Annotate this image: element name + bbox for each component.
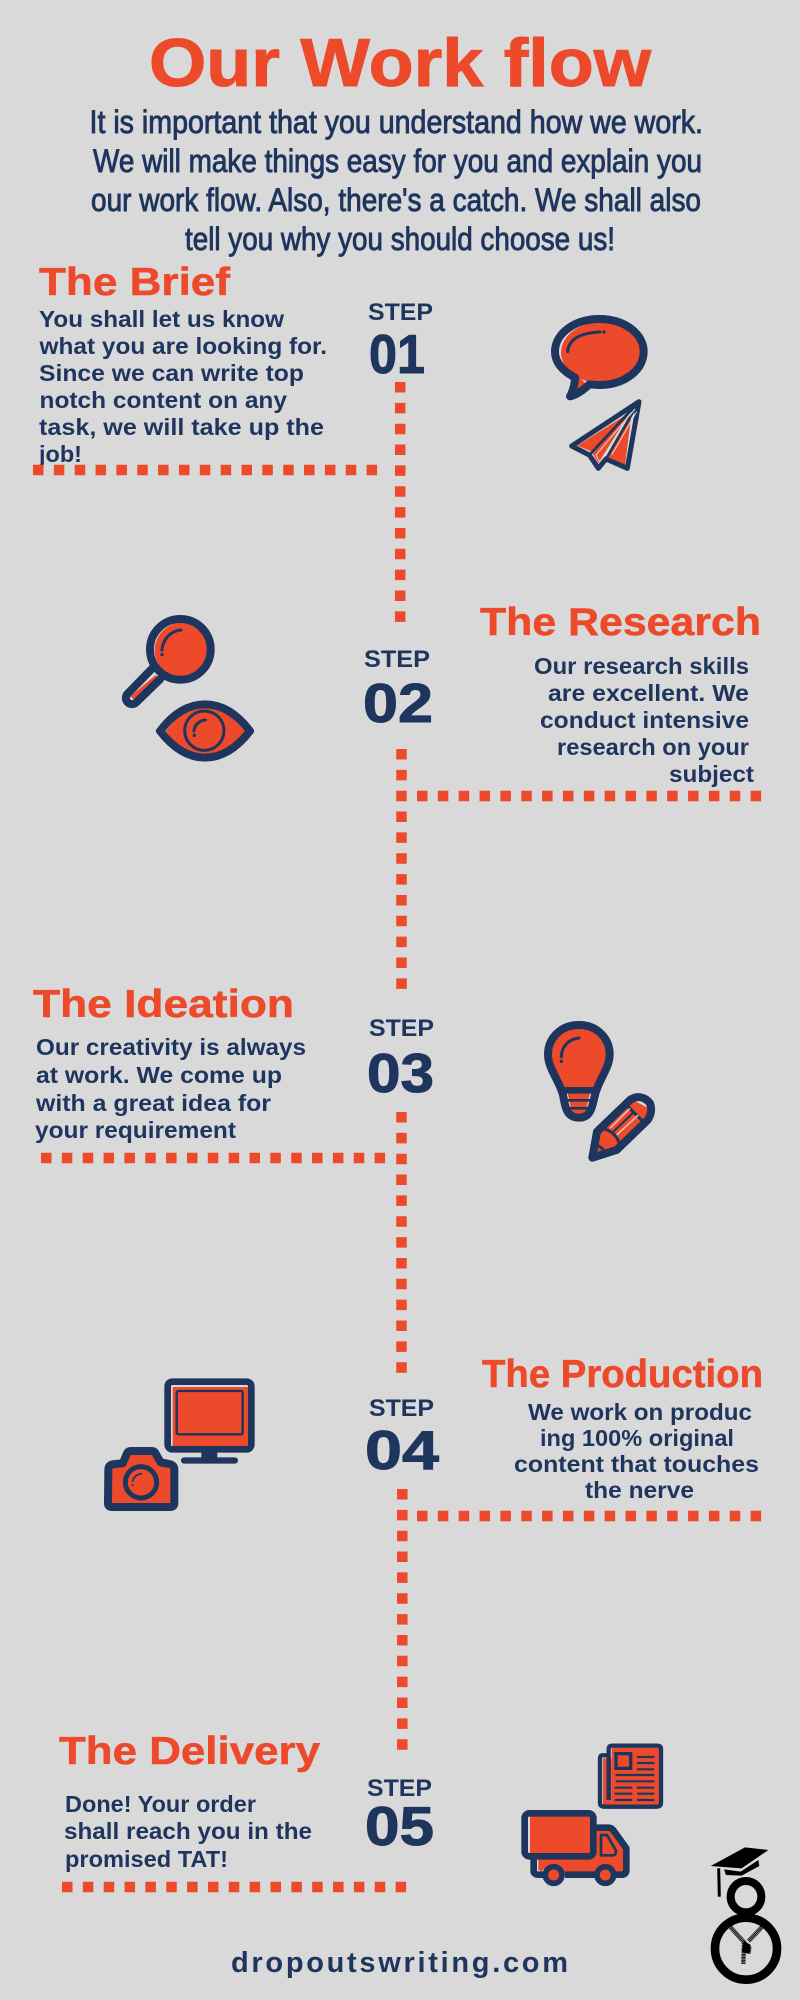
text: the brief description — [38, 306, 327, 467]
panel: step 5 the delivery — [59, 1730, 661, 1887]
heading: the production: The Production — [482, 1353, 763, 1396]
heading: the delivery: The Delivery — [59, 1730, 320, 1773]
step label 02 — [363, 646, 433, 734]
step label 01: STEP — [368, 299, 433, 326]
intro text: our work flow. Also, there's a catch. We shall also — [91, 182, 701, 218]
text: the ideation description: at work. We come up — [36, 1062, 282, 1088]
text: the research description — [534, 653, 754, 787]
text: the brief description: task, we will take up the — [39, 414, 324, 440]
connector: step 1 — [33, 382, 400, 622]
step label 05 — [365, 1775, 434, 1857]
text: the research description: conduct intensive — [540, 707, 749, 733]
step label 04 — [365, 1395, 439, 1481]
step label 05: STEP — [367, 1775, 432, 1802]
panel: step 3 the ideation — [33, 983, 652, 1373]
title: Our Work flow — [149, 25, 652, 101]
heading: the research: The Research — [480, 601, 761, 644]
text: the delivery description: Done! Your order — [65, 1791, 256, 1817]
intro text: We will make things easy for you and explain you — [93, 143, 702, 179]
text: the production description: content that touches — [514, 1451, 759, 1477]
text: the brief description: You shall let us know — [39, 306, 285, 332]
connector: step 3 — [41, 1112, 402, 1373]
icon: newspaper and delivery truck — [525, 1746, 661, 1883]
connector: step 5 — [62, 1882, 407, 1892]
panel: step 1 the brief — [33, 261, 644, 622]
icon: monitor and camera — [108, 1382, 251, 1507]
intro text: It is important that you understand how we work. — [90, 104, 703, 140]
text: the production description: ing 100% original — [540, 1425, 734, 1451]
intro text — [90, 104, 703, 257]
icon: speech bubble and paper plane — [555, 319, 644, 468]
text: the delivery description: promised TAT! — [65, 1846, 228, 1872]
step label 03: 03 — [367, 1042, 434, 1104]
step label 03 — [367, 1015, 434, 1104]
text: the production description — [514, 1399, 759, 1503]
text: the research description: Our research skills — [534, 653, 749, 679]
text: the brief description: Since we can write top — [39, 360, 304, 386]
step label 04: STEP — [369, 1395, 434, 1422]
step label 05: 05 — [365, 1795, 434, 1857]
panel: step 2 the research — [126, 601, 762, 989]
footer website: dropoutswriting.com — [231, 1947, 568, 1979]
text: the research description: are excellent. We — [548, 680, 749, 706]
step label 01 — [368, 299, 433, 385]
text: the ideation description: Our creativity is always — [36, 1034, 306, 1060]
text: the brief description: job! — [38, 441, 82, 467]
text: the ideation description: with a great idea for — [35, 1090, 271, 1116]
text: the production description: the nerve — [585, 1477, 694, 1503]
logo: graduate figure — [711, 1847, 777, 1980]
text: the brief description: notch content on any — [40, 387, 287, 413]
heading: the ideation: The Ideation — [33, 983, 294, 1026]
step label 03: STEP — [369, 1015, 434, 1042]
icon: magnifier and eye — [126, 619, 250, 758]
step label 04: 04 — [365, 1419, 439, 1481]
connector: step 4 — [402, 1489, 762, 1750]
intro text: tell you why you should choose us! — [185, 221, 615, 257]
icon: light bulb and pencil — [548, 1025, 652, 1158]
text: the production description: We work on produc — [528, 1399, 752, 1425]
text: the ideation description — [35, 1034, 306, 1143]
text: the research description: subject — [669, 761, 754, 787]
connector: step 2 — [402, 749, 762, 989]
panel: step 4 the production — [108, 1353, 763, 1750]
text: the delivery description — [64, 1791, 312, 1872]
step label 02: 02 — [363, 672, 433, 734]
text: the brief description: what you are looking for. — [38, 333, 327, 359]
step label 02: STEP — [364, 646, 430, 673]
text: the delivery description: shall reach you in the — [64, 1818, 312, 1844]
step label 01: 01 — [369, 323, 425, 385]
heading: the brief: The Brief — [39, 261, 231, 304]
text: the ideation description: your requirement — [35, 1117, 236, 1143]
text: the research description: research on your — [557, 734, 749, 760]
